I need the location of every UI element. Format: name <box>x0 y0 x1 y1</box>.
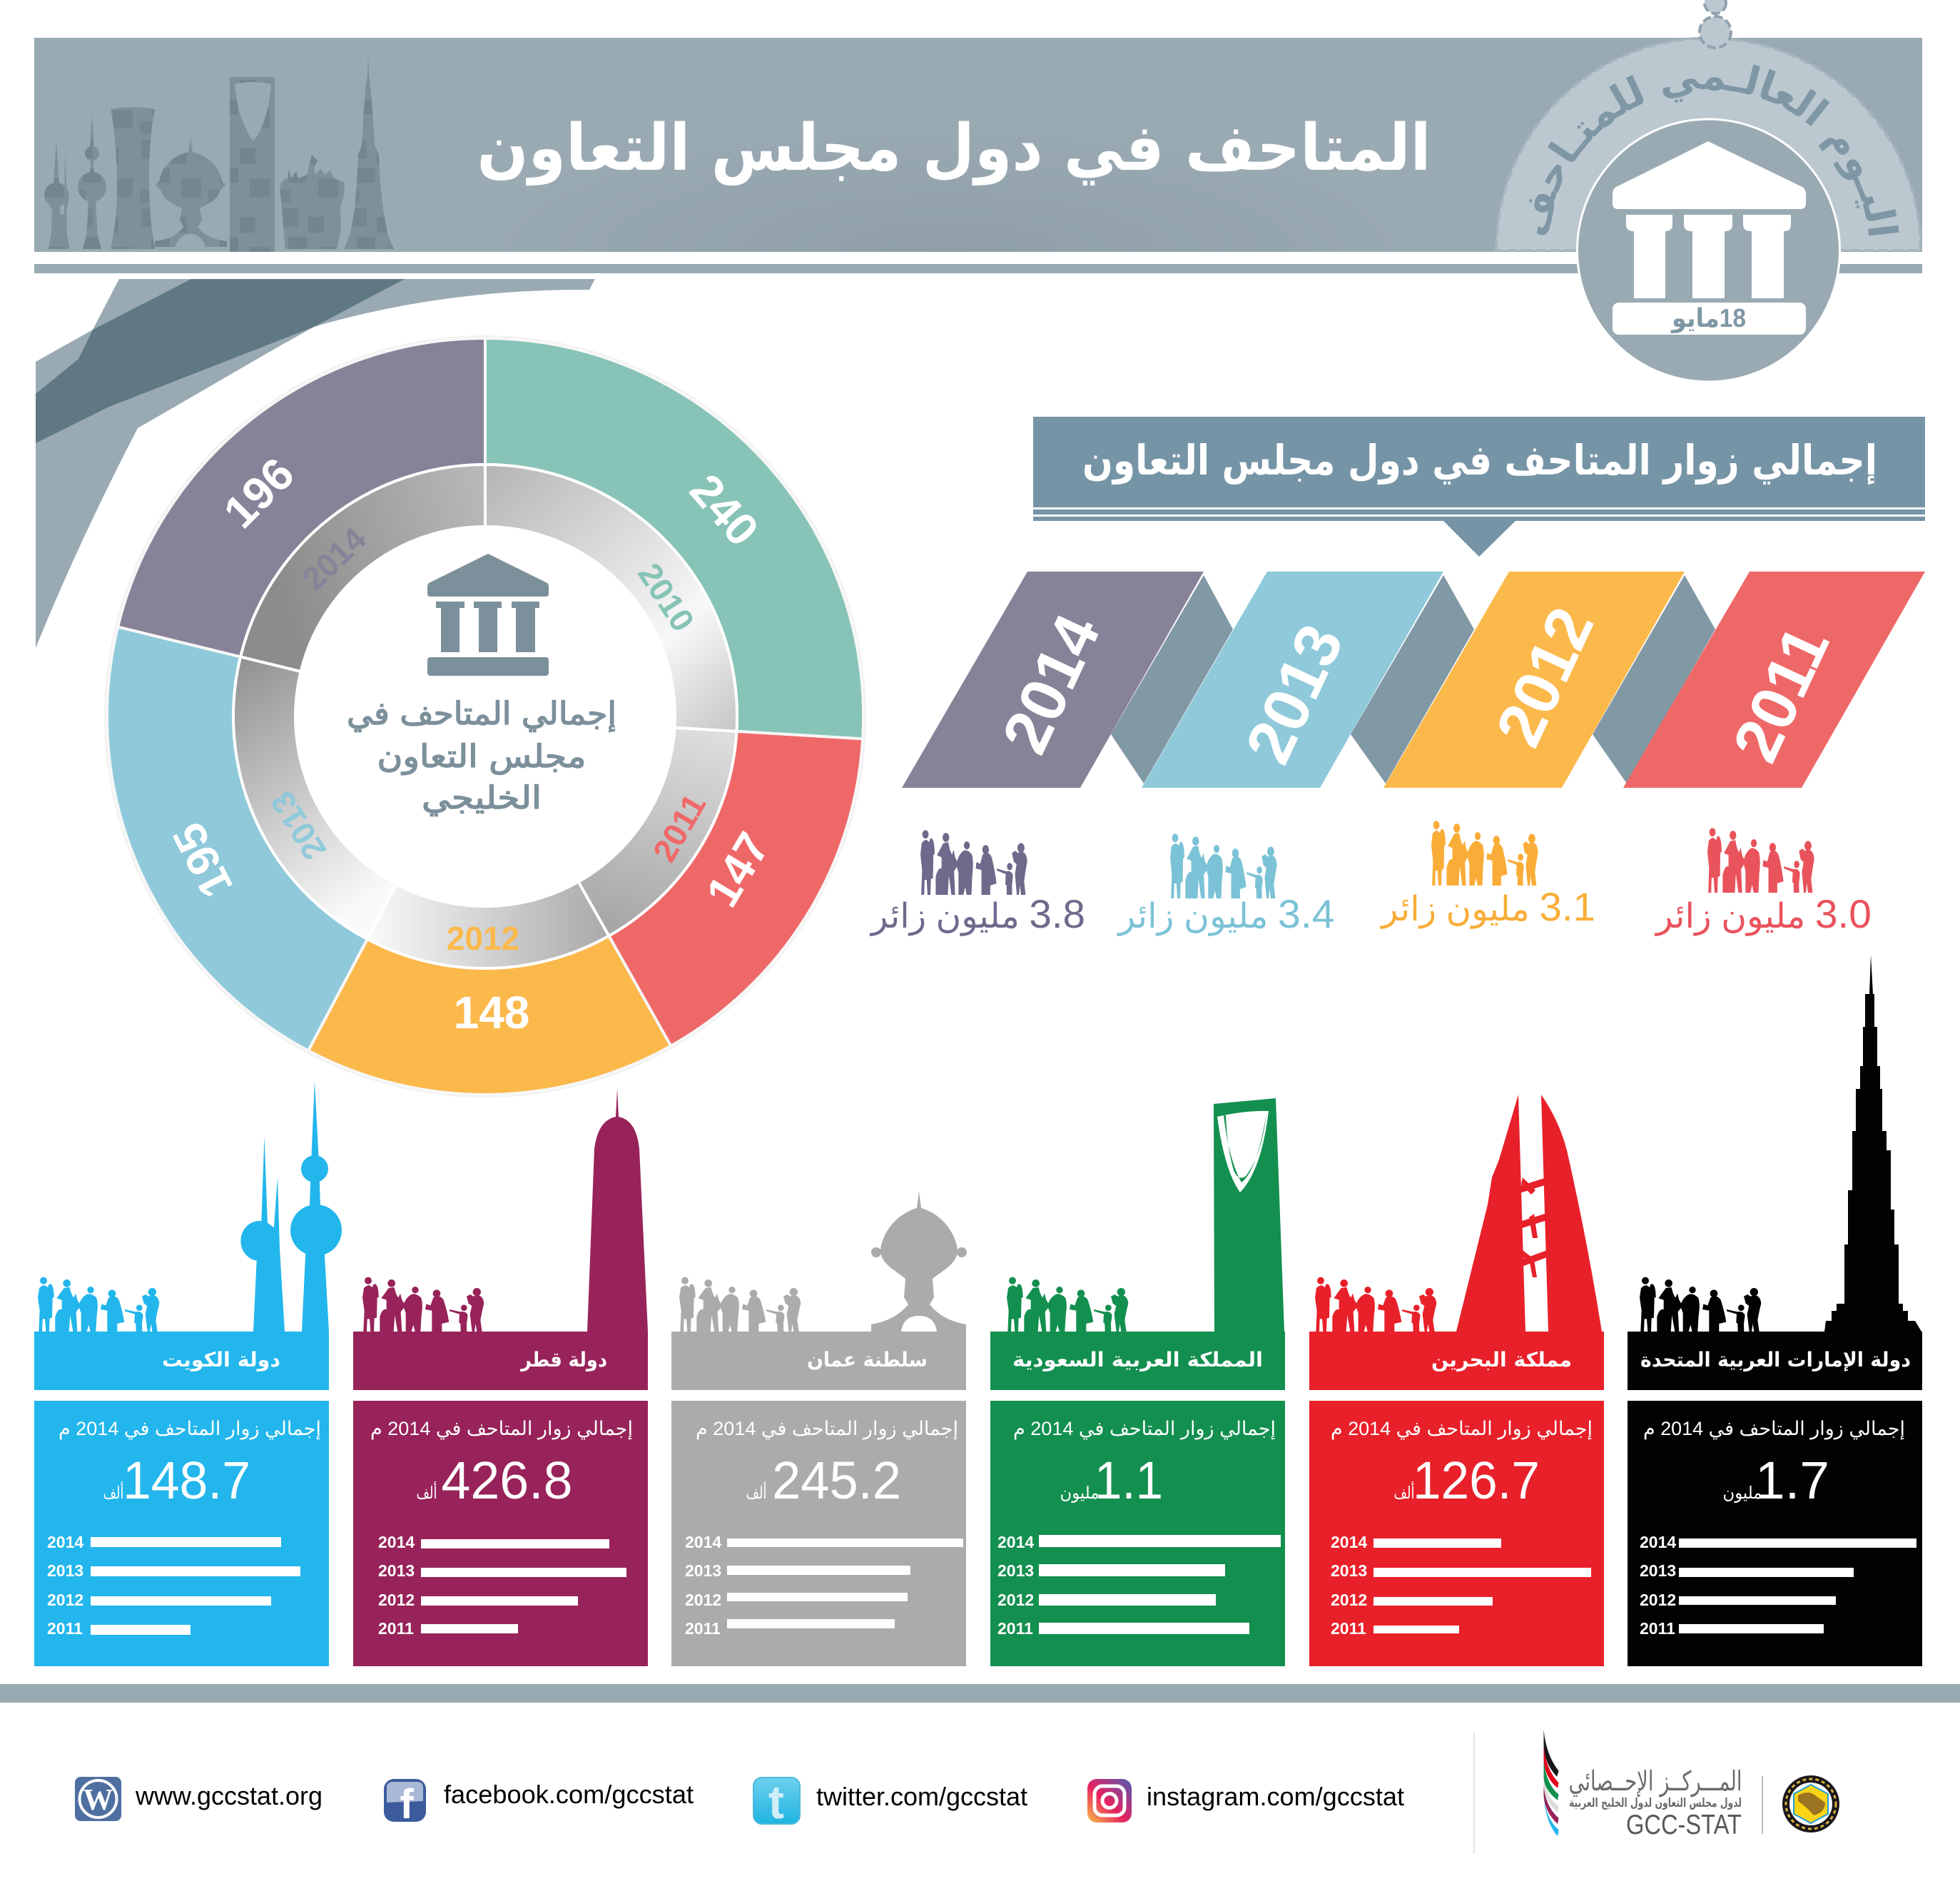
bar years: 2012 <box>1331 1591 1367 1609</box>
bar years: 2014 <box>1331 1533 1367 1551</box>
data card <box>34 1401 329 1666</box>
Kuwait towers <box>240 1081 342 1332</box>
unit: مليون <box>1722 1484 1762 1503</box>
country name: مملكة البحرين <box>1431 1348 1572 1372</box>
subtitle: إجمالي زوار المتاحف في 2014 م <box>696 1418 958 1440</box>
value: 1.1 <box>1095 1451 1163 1510</box>
data card <box>1628 1401 1922 1666</box>
bars <box>421 1539 626 1633</box>
panel: Saudi Arabia <box>990 1098 1285 1666</box>
unit: ألف <box>103 1481 124 1503</box>
bar years: 2011 <box>47 1619 83 1638</box>
country name: سلطنة عمان <box>807 1348 928 1372</box>
panel: Qatar <box>353 1089 648 1666</box>
logo arabic name: المـــركــز الإحــصائي <box>1568 1765 1742 1798</box>
year 2012 <box>1383 572 1685 788</box>
icon: facebook: f <box>400 1781 414 1827</box>
value: 426.8 <box>441 1451 572 1510</box>
bar years: 2013 <box>1331 1561 1367 1580</box>
Kingdom tower <box>1214 1098 1284 1332</box>
visitors 2014 <box>870 830 1085 936</box>
country name: المملكة العربية السعودية <box>1012 1348 1263 1372</box>
badge museum icon <box>1613 141 1806 335</box>
footer divider <box>1473 1733 1475 1854</box>
bar years <box>1640 1533 1676 1638</box>
bar years: 2012 <box>997 1591 1034 1609</box>
country name: دولة قطر <box>519 1348 607 1372</box>
people <box>362 1277 484 1332</box>
badge arch <box>1496 39 1921 250</box>
data card <box>1309 1401 1604 1666</box>
inner ring <box>233 465 737 968</box>
header band <box>34 38 1922 252</box>
donut values: 195 <box>163 815 243 906</box>
visitors 2011 <box>1655 828 1872 936</box>
panel: Bahrain <box>1309 1095 1604 1666</box>
people <box>679 1277 801 1332</box>
ring year labels: 2012 <box>447 920 519 957</box>
bar years: 2014 <box>378 1533 415 1551</box>
icon: museum <box>427 554 549 676</box>
bar years: 2013 <box>685 1561 721 1580</box>
panel: UAE <box>1628 955 1922 1666</box>
bar years: 2012 <box>378 1591 415 1609</box>
link: facebook: facebook.com/gccstat <box>444 1780 694 1809</box>
icon: instagram <box>1087 1779 1132 1822</box>
year 2012: 2012 <box>1483 597 1608 757</box>
icon: facebook <box>384 1779 426 1827</box>
segment 2010 <box>485 338 863 739</box>
bar years <box>47 1533 83 1638</box>
badge knobs <box>1700 0 1731 48</box>
visitors 2011: 3.0 مليون زائر <box>1655 891 1872 936</box>
Oman monument <box>871 1191 967 1332</box>
bar years: 2011 <box>1331 1619 1366 1638</box>
Doha tower <box>587 1089 648 1332</box>
bar years <box>997 1533 1034 1638</box>
yearly ribbon <box>902 572 1925 788</box>
donut values: 196 <box>213 447 304 538</box>
donut values: 240 <box>680 465 768 556</box>
Bahrain world trade center <box>1456 1095 1602 1332</box>
decorative ribbon <box>36 279 595 648</box>
bar years: 2011 <box>685 1619 721 1638</box>
bar years <box>685 1533 721 1638</box>
panel: Kuwait <box>34 1081 342 1666</box>
outer rim <box>106 337 865 1096</box>
ring year labels: 2013 <box>263 785 333 866</box>
link: instagram: instagram.com/gccstat <box>1147 1782 1404 1811</box>
bar years: 2014 <box>1640 1533 1676 1551</box>
visitors 2013: 3.4 مليون زائر <box>1117 891 1334 936</box>
ring year labels: 2014 <box>295 519 373 597</box>
ring year labels <box>263 519 713 957</box>
visitors 2012: 3.1 مليون زائر <box>1380 884 1595 929</box>
Burj Khalifa <box>1824 955 1921 1332</box>
donut centre text: مجلس التعاون <box>377 739 587 775</box>
value: 126.7 <box>1413 1451 1540 1510</box>
country header <box>990 1332 1285 1390</box>
bar years: 2014 <box>997 1533 1034 1551</box>
bar years: 2013 <box>378 1561 415 1580</box>
visitors 2014: 3.8 مليون زائر <box>870 891 1085 936</box>
logo: GCC-STAT <box>1544 1730 1742 1840</box>
bar years: 2014 <box>47 1533 83 1551</box>
donut values: 147 <box>696 823 779 916</box>
people <box>1315 1277 1436 1332</box>
icon: header skyline <box>44 53 394 252</box>
year 2013: 2013 <box>1232 614 1357 774</box>
subtitle: إجمالي زوار المتاحف في 2014 م <box>1013 1418 1276 1440</box>
bar years <box>378 1533 415 1638</box>
logo arabic subtitle: لدول مجلس التعاون لدول الخليج العربية <box>1569 1796 1742 1810</box>
panel: Oman <box>671 1191 967 1666</box>
people <box>1640 1277 1761 1332</box>
badge: international museum day <box>1495 0 1922 381</box>
country header <box>1628 1332 1922 1390</box>
bar years: 2014 <box>685 1533 721 1551</box>
year 2011 <box>1623 572 1925 788</box>
country name: دولة الإمارات العربية المتحدة <box>1640 1348 1911 1372</box>
segment 2011 <box>609 731 863 1046</box>
subtitle: إجمالي زوار المتاحف في 2014 م <box>1643 1418 1905 1440</box>
ring year labels: 2011 <box>646 788 713 868</box>
bar years: 2013 <box>47 1561 83 1580</box>
bars <box>1039 1535 1281 1634</box>
subtitle: إجمالي زوار المتاحف في 2014 م <box>59 1418 321 1440</box>
value: 148.7 <box>123 1451 250 1510</box>
header lower stripe <box>34 264 1922 273</box>
bar years <box>1331 1533 1367 1638</box>
year 2013 <box>1142 572 1443 788</box>
badge arc text: اليـوم العالـمي للمتـاحف <box>1528 64 1899 235</box>
bars <box>91 1537 300 1635</box>
subtitle: إجمالي زوار المتاحف في 2014 م <box>1331 1418 1593 1440</box>
country name: دولة الكويت <box>162 1348 280 1372</box>
bar years: 2011 <box>997 1619 1033 1638</box>
people <box>1007 1277 1128 1332</box>
donut centre text: الخليجي <box>422 780 542 816</box>
logo latin name: GCC-STAT <box>1626 1810 1742 1840</box>
donut values <box>163 447 779 1038</box>
people <box>38 1277 159 1332</box>
bars <box>727 1538 963 1628</box>
icon: twitter: t <box>768 1775 784 1828</box>
data card <box>671 1401 966 1666</box>
segment 2014 <box>118 338 485 656</box>
unit: مليون <box>1060 1484 1099 1503</box>
bar years: 2012 <box>685 1591 721 1609</box>
value: 245.2 <box>772 1451 901 1510</box>
bar years: 2012 <box>1640 1591 1676 1609</box>
year 2014: 2014 <box>989 604 1114 764</box>
segment 2012 <box>308 936 671 1095</box>
link: website: www.gccstat.org <box>135 1781 323 1810</box>
country header <box>1309 1332 1604 1390</box>
logo separator <box>1762 1776 1763 1834</box>
unit: ألف <box>1394 1481 1414 1503</box>
link: twitter: twitter.com/gccstat <box>816 1782 1027 1811</box>
value: 1.7 <box>1755 1451 1829 1510</box>
country header <box>671 1332 966 1390</box>
ring year labels: 2010 <box>631 557 702 638</box>
bar years: 2012 <box>47 1591 83 1609</box>
year 2014 <box>902 572 1204 788</box>
country header <box>34 1332 329 1390</box>
icon: twitter <box>753 1775 800 1828</box>
footer band <box>0 1684 1960 1703</box>
banner: total museum visitors <box>1033 417 1925 557</box>
country header <box>353 1332 648 1390</box>
ribbon folds <box>1111 575 1715 784</box>
unit: ألف <box>746 1481 766 1503</box>
donut centre text: إجمالي المتاحف في <box>347 696 616 732</box>
title: المتاحف في دول مجلس التعاون <box>477 111 1431 186</box>
data card <box>353 1401 648 1666</box>
icon: wordpress: W <box>83 1784 113 1817</box>
segment 2013 <box>107 627 367 1050</box>
year 2011: 2011 <box>1720 616 1843 772</box>
subtitle: إجمالي زوار المتاحف في 2014 م <box>370 1418 633 1440</box>
unit: ألف <box>417 1481 437 1503</box>
badge disc <box>1577 119 1839 382</box>
donut centre text <box>347 696 616 816</box>
bar years: 2013 <box>997 1561 1034 1580</box>
icon: wordpress <box>75 1777 121 1821</box>
logo ribbon <box>1544 1730 1559 1836</box>
bar years: 2011 <box>378 1619 414 1638</box>
bars <box>1679 1538 1916 1633</box>
data card <box>990 1401 1285 1666</box>
bars <box>1373 1538 1591 1633</box>
badge date: 18مايو <box>1670 303 1746 333</box>
logo: GCC emblem <box>1782 1775 1839 1832</box>
donut values: 148 <box>454 987 529 1038</box>
visitors 2013 <box>1117 833 1334 936</box>
bar years: 2011 <box>1640 1619 1675 1638</box>
bar years: 2013 <box>1640 1561 1676 1580</box>
visitors 2012 <box>1380 821 1595 929</box>
donut chart <box>106 337 865 1096</box>
